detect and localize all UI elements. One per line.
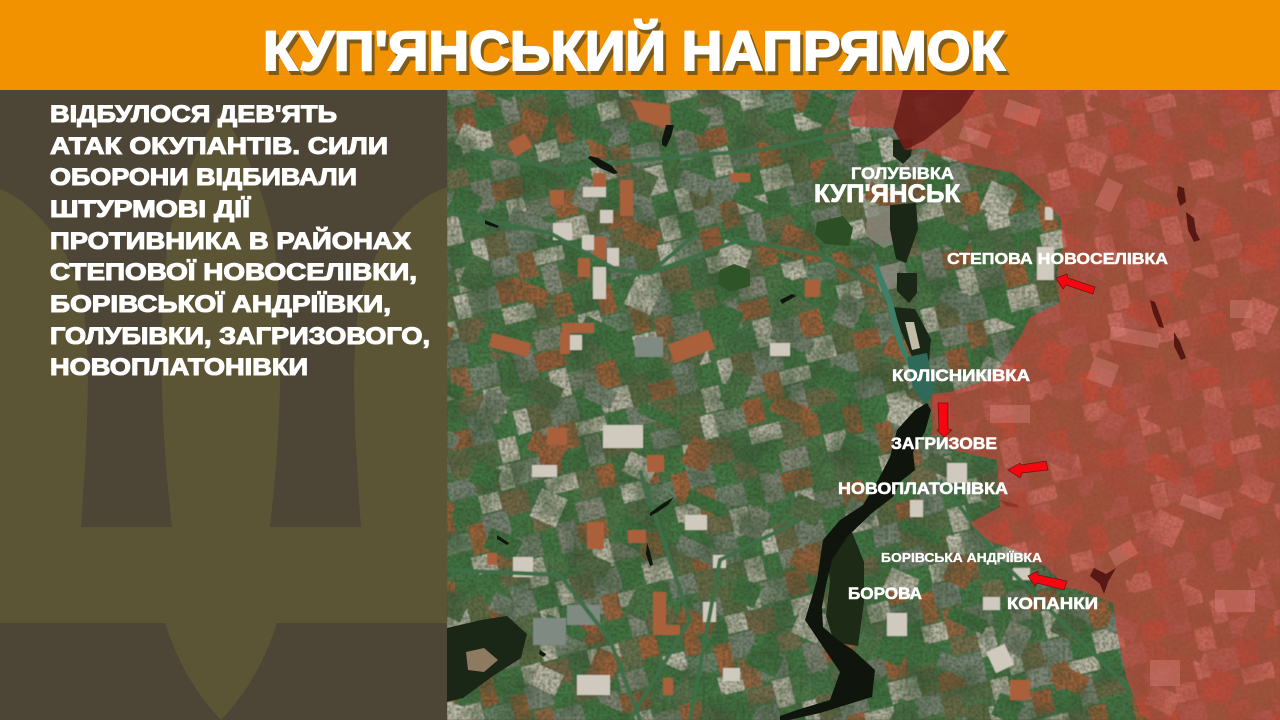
icon: trident emblem (0, 112, 452, 720)
text: summary of attacks (50, 101, 430, 381)
title shadow: КУП'ЯНСЬКИЙ НАПРЯМОК (266, 23, 1009, 86)
map: small dark lakes (485, 125, 1020, 657)
label: Колісниківка: КОЛІСНИКІВКА (892, 366, 1030, 385)
label: Загризове: ЗАГРИЗОВЕ (891, 434, 997, 453)
text: summary of attacks: ГОЛУБІВКИ, ЗАГРИЗОВОГО, (50, 323, 430, 350)
label: Куп'янськ: КУП'ЯНСЬК (814, 180, 961, 208)
label: Голубівка: ГОЛУБІВКА (851, 165, 954, 183)
text: summary of attacks: НОВОПЛАТОНІВКИ (50, 354, 308, 381)
label: Борівська Андріївка: БОРІВСЬКА АНДРІЇВКА (881, 550, 1043, 565)
arrow: to Борівська Андріївка (1028, 571, 1067, 590)
title: КУП'ЯНСЬКИЙ НАПРЯМОК (263, 19, 1006, 82)
label: Копанки: КОПАНКИ (1007, 594, 1098, 613)
map: field mosaic (447, 90, 1280, 720)
text: summary of attacks: АТАК ОКУПАНТІВ. СИЛИ (50, 133, 388, 160)
text: summary of attacks: ШТУРМОВІ ДІЇ (50, 196, 252, 223)
map: urban area of Kupiansk (866, 205, 902, 292)
label: Новоплатонівка: НОВОПЛАТОНІВКА (838, 479, 1008, 498)
arrow: to Загризове (937, 403, 952, 437)
label: Степова Новоселівка: СТЕПОВА НОВОСЕЛІВКА (947, 251, 1168, 268)
text: summary of attacks: ВІДБУЛОСЯ ДЕВ'ЯТЬ (50, 101, 337, 128)
arrow: to Степова Новоселівка (1056, 274, 1095, 294)
map: river and reservoir (780, 265, 935, 720)
text: summary of attacks: БОРІВСЬКОЇ АНДРІЇВКИ, (50, 291, 391, 318)
text: summary of attacks: ОБОРОНИ ВІДБИВАЛИ (50, 164, 357, 191)
arrow: to Новоплатонівка (1008, 461, 1048, 478)
header band (0, 0, 1280, 90)
text: summary of attacks: СТЕПОВОЇ НОВОСЕЛІВКИ, (50, 259, 417, 286)
map: forests (447, 138, 931, 702)
map: occupied territory overlay (848, 90, 1280, 720)
label: Борова: БОРОВА (848, 584, 922, 603)
text: summary of attacks: ПРОТИВНИКА В РАЙОНАХ (50, 227, 411, 255)
map: satellite view (447, 90, 1280, 720)
panel: left sidebar (0, 90, 452, 720)
